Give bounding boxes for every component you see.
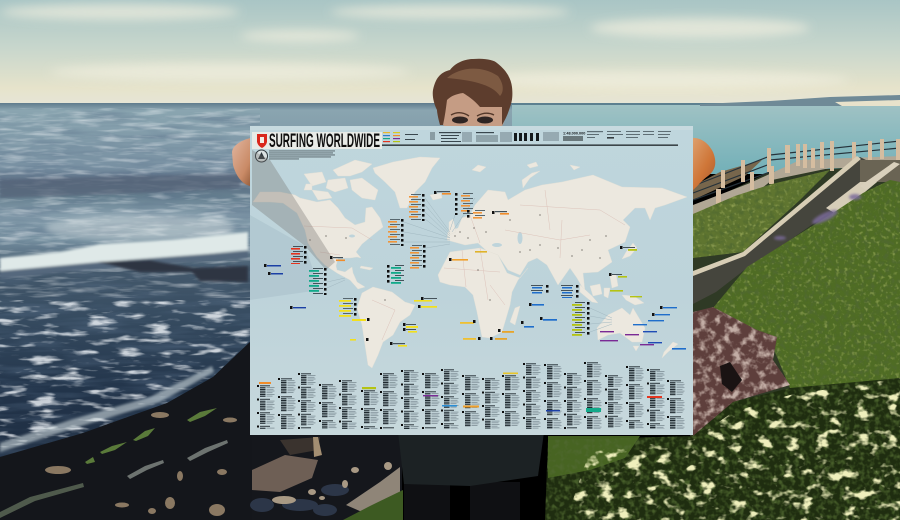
title: SURFING WORLDWIDE bbox=[269, 131, 380, 152]
South America bbox=[357, 287, 415, 368]
Southeast Asia islands bbox=[580, 285, 598, 303]
left hand bbox=[232, 137, 257, 186]
label stack: North Atlantic and Europe bbox=[385, 191, 509, 270]
main green slope bbox=[713, 180, 900, 395]
upper green slope bbox=[693, 170, 830, 258]
header text blocks bbox=[587, 131, 671, 139]
red earth bank bbox=[693, 307, 790, 436]
stair railing bbox=[693, 156, 861, 276]
Eurasia bbox=[447, 175, 687, 292]
Greenland bbox=[373, 157, 440, 208]
surf spot lists bbox=[257, 362, 685, 429]
label stacks: Americas bbox=[264, 246, 418, 347]
stones bbox=[45, 412, 237, 516]
boardwalk deck bbox=[693, 156, 900, 217]
poster: Surfing Worldwide map bbox=[250, 126, 693, 435]
background: shoreline rocks bbox=[0, 340, 403, 520]
Caribbean bbox=[360, 266, 373, 270]
North America bbox=[253, 192, 383, 289]
label stacks: Africa and Indian Ocean bbox=[414, 285, 579, 340]
map scale: 1:48.000.000 bbox=[563, 132, 585, 136]
person bbox=[232, 59, 715, 520]
foam edge bbox=[0, 366, 214, 452]
background: far headland bbox=[700, 95, 900, 106]
foam texture bbox=[0, 300, 250, 460]
borders and cities on land bbox=[304, 190, 625, 340]
background: ocean bbox=[0, 103, 900, 463]
purple flowers bbox=[774, 194, 861, 240]
fence posts bbox=[716, 139, 900, 209]
header legend bbox=[383, 132, 559, 142]
background: grassy cliff and boardwalk bbox=[545, 139, 900, 520]
fence rails bbox=[693, 141, 900, 200]
rule bbox=[382, 144, 678, 146]
earthy slope behind fence bbox=[693, 160, 762, 200]
logo shield bbox=[257, 134, 267, 148]
British Isles bbox=[449, 219, 456, 235]
sun glitter bbox=[45, 215, 235, 241]
inland water bbox=[349, 232, 522, 247]
legs bbox=[404, 482, 450, 520]
bush near legs bbox=[343, 490, 403, 520]
Australia bbox=[597, 308, 645, 342]
driftwood slabs bbox=[0, 440, 228, 518]
Madagascar bbox=[510, 306, 520, 325]
hair bbox=[433, 59, 512, 125]
eyes bbox=[452, 116, 493, 124]
Japan bbox=[622, 243, 637, 259]
stairs bbox=[826, 161, 900, 214]
neck and face bbox=[442, 88, 504, 130]
Arctic islands bbox=[333, 160, 372, 176]
leader lines to Europe bbox=[327, 198, 612, 332]
seal icon bbox=[256, 150, 268, 162]
background: sky bbox=[0, 0, 900, 104]
surf wave band bbox=[0, 232, 248, 282]
skirt bbox=[398, 432, 544, 486]
retaining wall bbox=[693, 157, 866, 304]
right hand bbox=[687, 138, 715, 190]
continents bbox=[253, 157, 687, 368]
flower meadow bbox=[545, 378, 900, 520]
label stacks: Asia and Oceania bbox=[570, 246, 686, 350]
algae bbox=[85, 408, 217, 464]
fold shadow band bbox=[252, 150, 335, 270]
dark water band bbox=[0, 174, 240, 198]
header strip bbox=[250, 126, 693, 152]
intro text bbox=[269, 150, 335, 159]
Africa bbox=[438, 248, 528, 338]
list colour headings bbox=[259, 382, 271, 384]
